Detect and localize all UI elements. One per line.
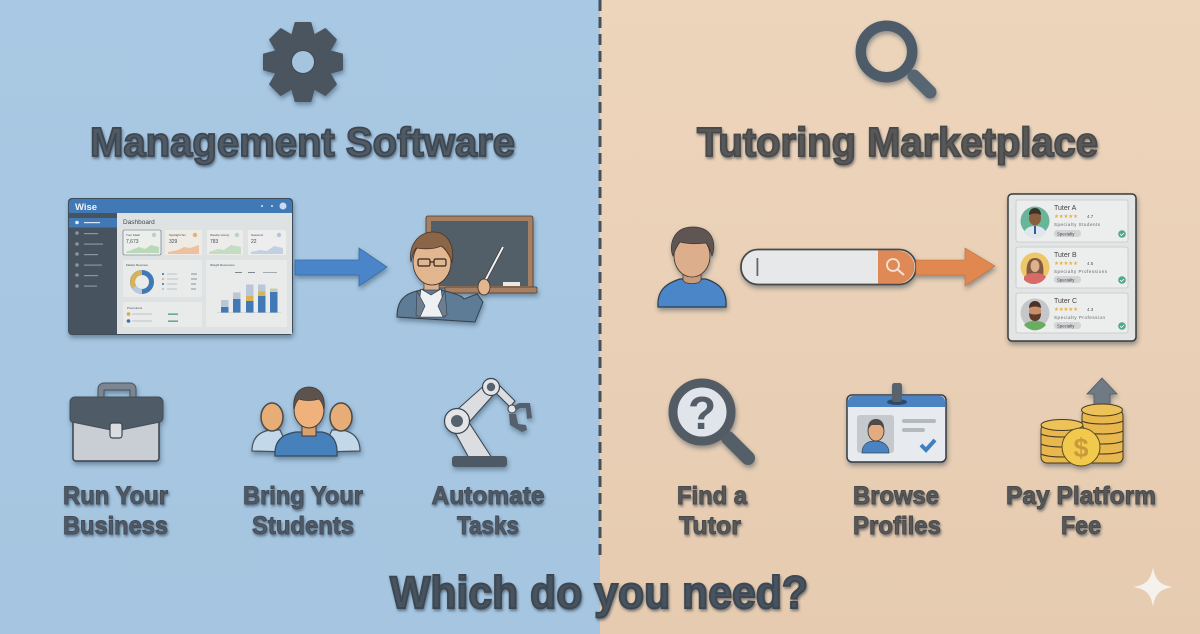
tutor card C: Specialty	[1057, 324, 1075, 328]
tutor card C: 4.3	[1087, 307, 1094, 312]
icon: magnifier with question mark	[673, 383, 748, 458]
donut chart panel: Market Revenue	[126, 263, 148, 267]
icon: briefcase	[70, 383, 163, 461]
tutor card A: ★★★★★	[1054, 213, 1078, 220]
tutor card A: Specialty Students	[1054, 222, 1101, 227]
dashboard window	[68, 198, 293, 335]
stat card 2: Spotlight Sm	[169, 233, 187, 237]
stat card 2: 329	[169, 239, 178, 245]
search bar	[741, 250, 916, 284]
icon: robotic arm	[444, 378, 532, 467]
panel: tutoring marketplace background	[600, 0, 1200, 634]
bottom question: Which do you need?	[390, 567, 808, 618]
icon: ID badge	[847, 383, 946, 462]
tutor card C: Tuter C	[1054, 298, 1077, 305]
icon: gear	[264, 23, 342, 101]
stat card 4: Sessions	[251, 233, 264, 237]
window header	[69, 199, 292, 213]
tutor card B: Specialty Professions	[1054, 269, 1108, 274]
arrow: blue	[295, 248, 387, 286]
label: Run Your Business: Business	[63, 512, 168, 540]
tutor card A: Specialty	[1057, 232, 1075, 236]
tutor results panel	[1008, 194, 1136, 341]
label: Find a Tutor: Tutor	[679, 512, 741, 540]
icon: group of students	[252, 387, 360, 456]
donut chart panel	[123, 260, 202, 297]
icon: coins with upward arrow: $	[1073, 433, 1089, 463]
dashboard title: Dashboard	[123, 219, 155, 226]
stacked bar chart panel: Weight Resources	[210, 263, 235, 267]
label: Pay Platform Fee: Fee	[1061, 512, 1101, 540]
tutor card A	[1016, 200, 1128, 242]
stat card 3	[207, 230, 243, 255]
label: Automate Tasks: Tasks	[457, 512, 519, 540]
tutor card B: ★★★★★	[1054, 260, 1078, 267]
stat card 2	[165, 230, 202, 255]
label: Bring Your Students: Bring Your	[243, 482, 363, 510]
panel: management software background	[0, 0, 600, 634]
heading: Tutoring Marketplace: Tutoring Marketplace	[697, 119, 1098, 165]
tutor card C: Specialty Profession	[1054, 315, 1105, 320]
stat card 1: Tuor Flash	[126, 233, 141, 237]
stat card 4: 22	[251, 239, 257, 245]
label: Bring Your Students: Students	[252, 512, 354, 540]
tutor card B	[1016, 247, 1128, 288]
icon: magnifying glass	[861, 26, 930, 92]
heading: Management Software: Management Software	[90, 119, 515, 165]
stat card 1: 7,673	[126, 239, 139, 245]
tutor card C	[1016, 293, 1128, 333]
tutor card B: Specialty	[1057, 278, 1075, 282]
label: Pay Platform Fee: Pay Platform	[1006, 482, 1156, 510]
tutor card A: 4.7	[1087, 214, 1094, 219]
icon: magnifier with question mark: ?	[688, 387, 716, 439]
tutor card A: Tuter A	[1054, 205, 1077, 212]
sidebar	[69, 213, 117, 334]
tutor card C: ★★★★★	[1054, 306, 1078, 313]
stat card 3: 783	[210, 239, 219, 245]
sparkle mark	[1133, 567, 1173, 607]
arrow: orange	[916, 248, 995, 286]
icon: student avatar	[658, 227, 726, 307]
stat card 3: Weekly Hourly	[210, 233, 230, 237]
tutor card B: Tuter B	[1054, 252, 1077, 259]
icon: coins with upward arrow	[1041, 378, 1123, 466]
tutor card B: 4.5	[1087, 261, 1094, 266]
label: Browse Profiles: Profiles	[853, 512, 941, 540]
label: Find a Tutor: Find a	[677, 482, 748, 510]
bottom table panel: Promotions	[127, 306, 143, 310]
window header: Wise	[75, 202, 97, 213]
label: Browse Profiles: Browse	[853, 482, 939, 510]
stat card 1	[123, 230, 161, 255]
stacked bar chart panel	[206, 260, 287, 327]
label: Run Your Business: Run Your	[63, 482, 168, 510]
stat card 4	[248, 230, 286, 255]
icon: teacher at chalkboard	[397, 216, 537, 322]
label: Automate Tasks: Automate	[432, 482, 545, 510]
bottom table panel	[123, 302, 202, 327]
